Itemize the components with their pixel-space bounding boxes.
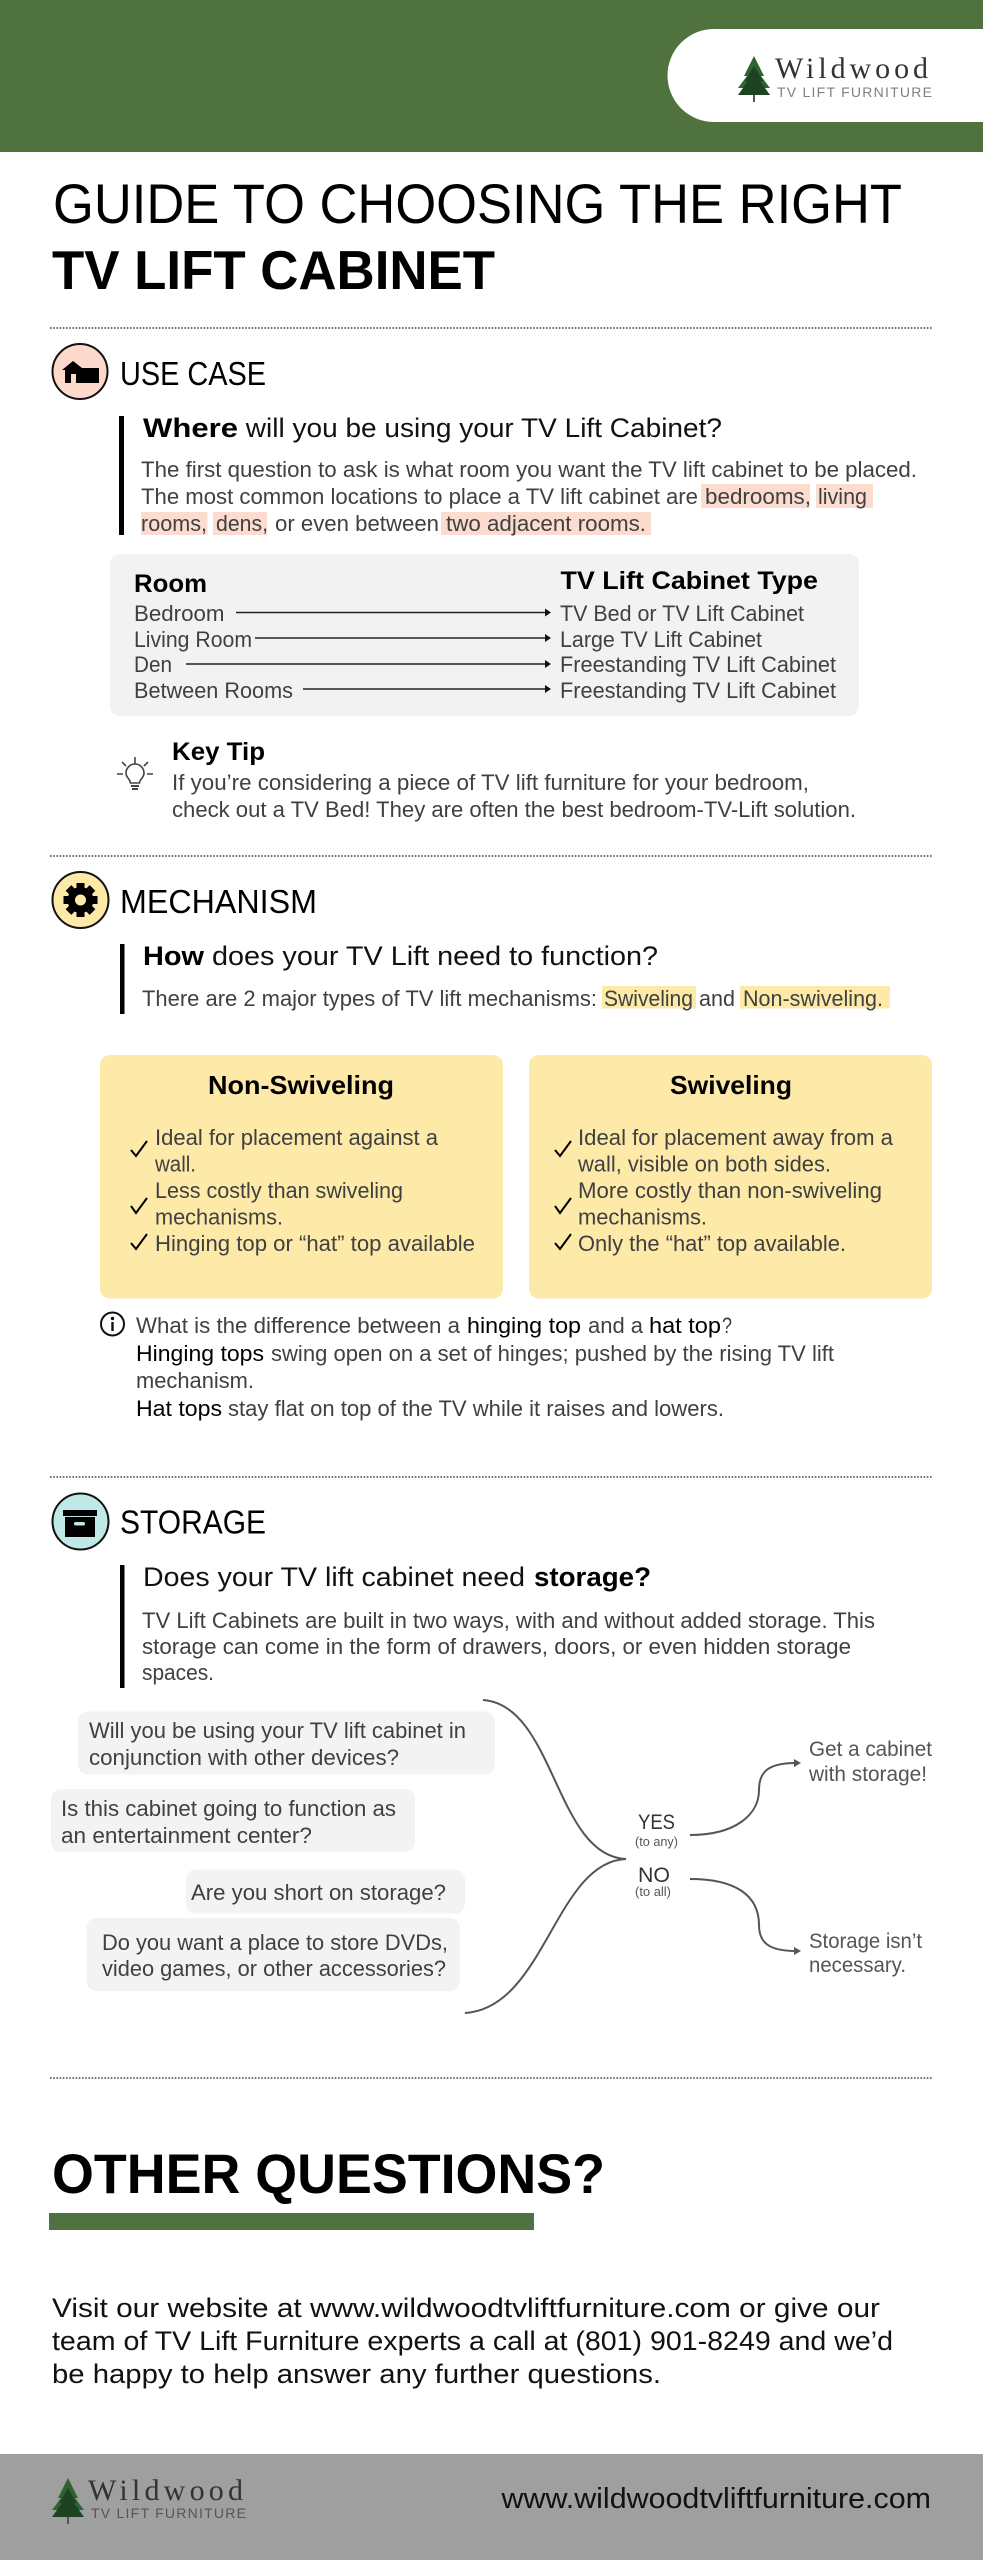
- intro block: how: and: [699, 986, 735, 1011]
- green underline bar: [49, 2213, 534, 2230]
- heading: storage: STORAGE: [120, 1504, 266, 1540]
- section: mechanism: [52, 872, 932, 1421]
- panel: non-swiveling: mechanisms.: [155, 1204, 283, 1230]
- arrow: no to storage isn't necessary: [690, 1879, 801, 1955]
- outcome: storage isn't necessary: Storage isn’t: [809, 1930, 922, 1953]
- panel: swiveling: [529, 1055, 932, 1298]
- section: storage: [51, 1494, 932, 2013]
- question bubble: dvds: [86, 1918, 460, 1991]
- intro block: storage question: storage can come in the form of drawers, doors, or even hidden storage: [142, 1634, 851, 1659]
- key tip: If you’re considering a piece of TV lift furniture for your bedroom,: [172, 770, 809, 795]
- intro block: where: [119, 413, 917, 536]
- footer website: www.wildwoodtvliftfurniture.com: [500, 2483, 931, 2515]
- heading: mechanism: MECHANISM: [120, 883, 317, 920]
- intro block: where: or even between: [275, 511, 439, 536]
- intro block: where: bedrooms,: [705, 484, 811, 509]
- title: [52, 172, 902, 301]
- footer band: [0, 2454, 983, 2560]
- outcome: get a cabinet with storage: Get a cabinet: [809, 1738, 932, 1761]
- no answer: NO: [638, 1864, 670, 1887]
- panel: non-swiveling: Less costly than swiveling: [155, 1178, 403, 1203]
- note: hinging top vs hat top: hat top: [649, 1313, 721, 1338]
- intro block: storage question: spaces.: [142, 1660, 214, 1685]
- note: hinging top vs hat top: swing open on a set of hinges; pushed by the rising TV lift: [271, 1341, 834, 1366]
- no answer: (to all): [635, 1884, 671, 1899]
- note: hinging top vs hat top: [136, 1313, 834, 1421]
- contact paragraph: [52, 2293, 893, 2389]
- panel: swiveling: Ideal for placement away from a: [578, 1125, 894, 1150]
- note: hinging top vs hat top: and a: [588, 1313, 644, 1338]
- intro block: how: Swiveling: [604, 986, 693, 1011]
- intro block: how: There are 2 major types of TV lift mechanisms:: [142, 986, 597, 1011]
- question bubble: entertainment center: Is this cabinet going to function as: [61, 1796, 396, 1821]
- note: hinging top vs hat top: Hinging tops: [136, 1341, 264, 1366]
- outcome: get a cabinet with storage: with storage!: [808, 1763, 927, 1786]
- intro block: where: dens,: [216, 511, 268, 536]
- note: hinging top vs hat top: hinging top: [467, 1313, 581, 1338]
- contact paragraph: team of TV Lift Furniture experts a call at (801) 901-8249 and we’d: [52, 2326, 893, 2356]
- panel: room to cabinet type table: Den: [134, 652, 172, 677]
- intro block: where: living: [818, 484, 867, 509]
- question bubble: devices: [78, 1712, 495, 1774]
- title: GUIDE TO CHOOSING THE RIGHT: [53, 172, 902, 235]
- intro block: how: does your TV Lift need to function?: [204, 941, 658, 971]
- heading: other questions: OTHER QUESTIONS?: [52, 2142, 605, 2205]
- note: hinging top vs hat top: Hat tops: [136, 1396, 222, 1421]
- note: hinging top vs hat top: mechanism.: [136, 1368, 254, 1393]
- contact paragraph: Visit our website at www.wildwoodtvliftfurniture.com or give our: [52, 2293, 880, 2323]
- icon: info: [101, 1312, 124, 1336]
- footer logo: TV LIFT FURNITURE: [91, 2505, 246, 2521]
- logo: Wildwood TV Lift Furniture: TV LIFT FURNITURE: [777, 84, 932, 100]
- question bubble: devices: conjunction with other devices?: [89, 1745, 399, 1770]
- panel: room to cabinet type table: TV Bed or TV Lift Cabinet: [560, 601, 804, 626]
- question bubble: devices: Will you be using your TV lift cabinet in: [89, 1718, 466, 1743]
- contact paragraph: be happy to help answer any further questions.: [52, 2359, 661, 2389]
- panel: swiveling: More costly than non-swiveling: [578, 1178, 882, 1203]
- icon: gear: [52, 872, 108, 928]
- header banner: [0, 0, 983, 152]
- intro block: where: The most common locations to place a TV lift cabinet are: [141, 484, 698, 509]
- bracket curves joining questions: [465, 1700, 626, 2013]
- panel: room to cabinet type table: [110, 554, 859, 716]
- question bubble: short on storage: Are you short on storage?: [191, 1880, 446, 1905]
- intro block: how: How: [143, 941, 205, 971]
- yes answer: (to any): [635, 1834, 678, 1849]
- key tip: [172, 738, 856, 822]
- no answer: [635, 1864, 671, 1899]
- intro block: storage question: TV Lift Cabinets are built in two ways, with and without added storage. This: [142, 1608, 875, 1633]
- arrow: yes to get a cabinet: [690, 1759, 801, 1835]
- panel: room to cabinet type table: Room: [134, 570, 207, 598]
- panel: room to cabinet type table: Freestanding TV Lift Cabinet: [560, 678, 836, 703]
- intro block: where: will you be using your TV Lift Cabinet?: [238, 413, 722, 443]
- outcome: get a cabinet with storage: [808, 1738, 932, 1786]
- panel: room to cabinet type table: Freestanding TV Lift Cabinet: [560, 652, 836, 677]
- panel: swiveling: Only the “hat” top available.: [578, 1231, 846, 1256]
- panel: room to cabinet type table: Living Room: [134, 627, 252, 652]
- panel: room to cabinet type table: Large TV Lift Cabinet: [560, 627, 762, 652]
- footer logo: Wildwood: [88, 2474, 243, 2507]
- intro block: where: Where: [143, 413, 238, 443]
- key tip: check out a TV Bed! They are often the best bedroom-TV-Lift solution.: [172, 797, 856, 822]
- panel: non-swiveling: Non-Swiveling: [208, 1070, 394, 1100]
- intro block: where: two adjacent rooms.: [446, 511, 646, 536]
- intro block: where: The first question to ask is what room you want the TV lift cabinet to be placed.: [141, 457, 917, 482]
- panel: non-swiveling: wall.: [154, 1152, 196, 1176]
- panel: swiveling: mechanisms.: [578, 1204, 707, 1230]
- logo: Wildwood TV Lift Furniture: [738, 52, 932, 102]
- panel: non-swiveling: Ideal for placement against a: [155, 1125, 439, 1150]
- intro block: how: [120, 941, 890, 1014]
- section: use case: [52, 344, 917, 822]
- outcome: storage isn't necessary: [809, 1930, 922, 1977]
- panel: non-swiveling: Hinging top or “hat” top available: [155, 1231, 475, 1256]
- question bubble: entertainment center: an entertainment center?: [61, 1823, 312, 1848]
- key tip: Key Tip: [172, 738, 265, 766]
- question bubble: dvds: video games, or other accessories?: [102, 1956, 446, 1981]
- note: hinging top vs hat top: ?: [722, 1313, 732, 1338]
- icon: house: [52, 344, 108, 399]
- note: hinging top vs hat top: stay flat on top of the TV while it raises and lowers.: [228, 1396, 724, 1421]
- intro block: how: Non-swiveling.: [743, 986, 883, 1011]
- outcome: storage isn't necessary: necessary.: [809, 1954, 906, 1977]
- logo: Wildwood TV Lift Furniture: Wildwood: [775, 52, 928, 85]
- intro block: storage question: storage?: [534, 1562, 651, 1592]
- intro block: storage question: Does your TV lift cabinet need: [143, 1562, 525, 1592]
- question bubble: short on storage: [186, 1870, 465, 1914]
- panel: room to cabinet type table: TV Lift Cabinet Type: [560, 567, 818, 595]
- yes answer: [635, 1811, 678, 1849]
- heading: use case: USE CASE: [120, 355, 266, 392]
- icon: light bulb: [117, 757, 153, 789]
- panel: non-swiveling: [100, 1055, 503, 1298]
- panel: room to cabinet type table: Bedroom: [134, 601, 224, 626]
- intro block: where: rooms,: [141, 511, 207, 536]
- intro block: storage question: [120, 1562, 875, 1688]
- yes answer: YES: [638, 1811, 675, 1834]
- panel: swiveling: wall, visible on both sides.: [577, 1152, 831, 1176]
- note: hinging top vs hat top: What is the difference between a: [136, 1313, 461, 1338]
- question bubble: dvds: Do you want a place to store DVDs,: [102, 1930, 448, 1955]
- icon: storage box: [52, 1494, 108, 1550]
- panel: room to cabinet type table: Between Rooms: [134, 678, 293, 703]
- footer logo: [52, 2474, 246, 2524]
- title: TV LIFT CABINET: [52, 239, 495, 301]
- panel: swiveling: Swiveling: [670, 1070, 792, 1100]
- question bubble: entertainment center: [51, 1789, 415, 1852]
